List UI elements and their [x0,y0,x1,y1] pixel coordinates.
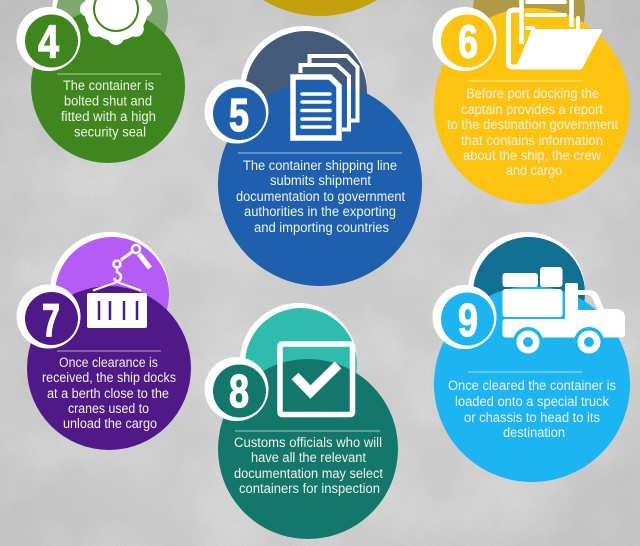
divider and text: step 4: bolted shut and [64,94,152,108]
divider and text: step 8: containers for inspection [239,481,380,496]
divider and text: step 5: submits shipment [270,173,371,188]
badge: number 5 [204,80,268,144]
badge: number 6: 6 [458,16,478,68]
divider and text: step 6: Before port docking the [466,86,599,101]
divider and text: step 4: The container is [63,78,154,93]
divider and text: step 4 [57,74,161,140]
icon: folder with documents [508,0,602,70]
divider and text: step 7: unload the cargo [63,416,157,431]
icon: stack of documents [293,56,358,138]
badge: number 8: 8 [229,365,249,417]
divider and text: step 5: authorities in the exporting [244,204,396,219]
divider and text: step 6: about the ship, the crew [463,148,601,163]
previous step circle, cropped at top [210,0,430,16]
icon: delivery truck [502,267,625,357]
badge: number 7 [16,284,80,348]
icon: checkbox [280,344,352,414]
divider and text: step 8: have all the relevant [251,450,366,465]
divider and text: step 7: Once clearance is [59,355,158,370]
panel: step 7 crane [16,232,191,450]
divider and text: step 8: documentation may select [234,466,383,481]
divider and text: step 7: received, the ship docks [42,370,176,385]
panel: step 5 documents [204,26,422,286]
badge: number 4 [16,7,80,71]
divider and text: step 4: security seal [74,124,146,140]
divider and text: step 6: captain provides a report [461,102,603,117]
icon: security seal [80,0,152,45]
divider and text: step 9: or chassis to head to its [464,410,600,425]
divider and text: step 7: cranes used to [68,401,149,416]
divider and text: step 6: that contains information [461,133,603,148]
badge: number 9: 9 [458,294,478,346]
divider and text: step 7 [42,351,176,431]
divider and text: step 5 [236,153,405,235]
panel: step 9 truck [432,232,630,482]
divider and text: step 9: Once cleared the container is [448,378,616,393]
divider and text: step 9: loaded onto a special truck [455,394,609,409]
divider and text: step 4: fitted with a high [61,109,156,124]
panel: step 4 seal [16,0,185,163]
divider and text: step 7: at a berth close to the [47,386,169,401]
badge: number 7: 7 [42,294,60,346]
divider and text: step 6: to the destination government [447,117,618,132]
badge: number 8 [204,357,268,421]
badge: number 4: 4 [38,16,59,68]
icon: crane lifting container [87,245,150,328]
divider and text: step 9: destination [503,425,565,440]
divider and text: step 6 [447,81,618,178]
divider and text: step 8 [234,431,383,496]
badge: number 6 [432,7,496,71]
badge: number 9 [432,285,496,349]
divider and text: step 9 [448,372,616,440]
divider and text: step 5: documentation to government [236,189,405,204]
divider and text: step 6: and cargo [506,163,562,178]
panel: step 8 customs inspection [204,303,398,539]
divider and text: step 5: The container shipping line [243,158,397,173]
badge: number 5: 5 [229,89,249,141]
divider and text: step 8: Customs officials who will [234,435,382,450]
panel: step 6 report [432,0,630,204]
divider and text: step 5: and importing countries [254,220,389,235]
